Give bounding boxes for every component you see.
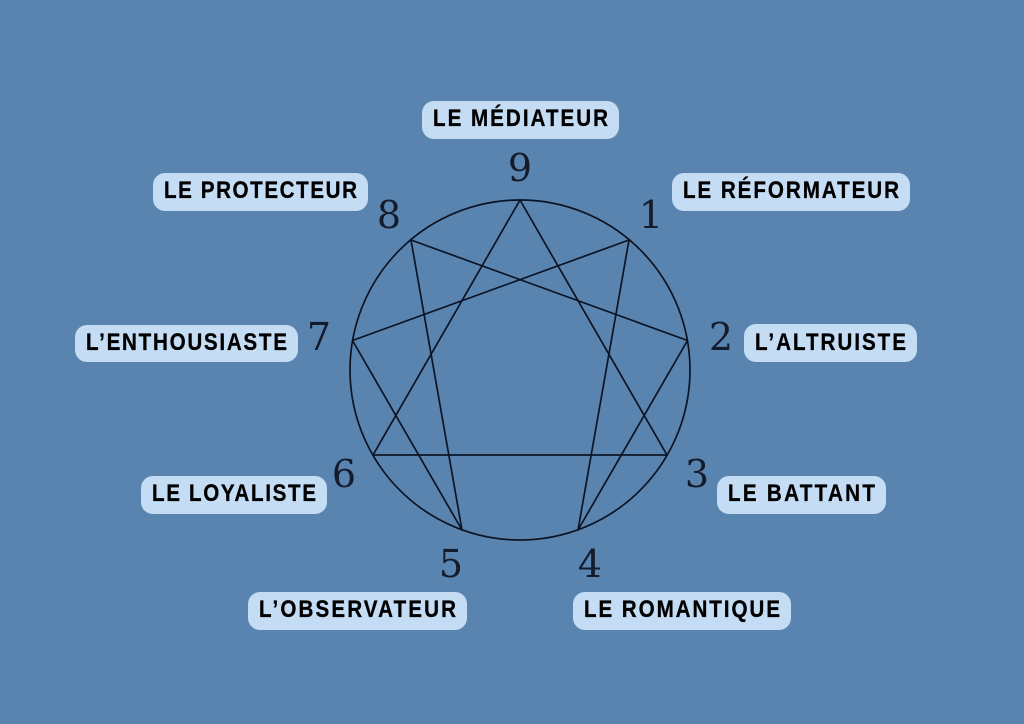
- number 7: 7: [307, 315, 331, 359]
- label: L'Altruiste: [744, 324, 917, 362]
- number 5: 5: [439, 542, 463, 586]
- label: Le Médiateur: LE MÉDIATEUR: [433, 105, 608, 131]
- label: L'Enthousiaste: L’ENTHOUSIASTE: [86, 329, 287, 355]
- label: L'Observateur: [248, 592, 467, 630]
- number 8: 8: [377, 193, 401, 237]
- label: L'Enthousiaste: [75, 325, 298, 362]
- label: Le Médiateur: [422, 101, 619, 139]
- number 9: 9: [508, 146, 532, 190]
- triangle 9-3-6: [373, 200, 667, 455]
- label: Le Protecteur: [153, 173, 368, 211]
- label: Le Battant: LE BATTANT: [728, 480, 875, 506]
- label: Le Battant: [717, 476, 886, 514]
- number 4: 4: [578, 542, 602, 586]
- number 2: 2: [709, 315, 733, 359]
- enneagram diagram: [350, 200, 690, 540]
- label: Le Réformateur: LE RÉFORMATEUR: [683, 177, 899, 203]
- outer circle: [350, 200, 690, 540]
- number 6: 6: [332, 452, 356, 496]
- label: L'Observateur: L’OBSERVATEUR: [259, 596, 456, 622]
- label: Le Réformateur: [672, 173, 910, 211]
- label: L'Altruiste: L’ALTRUISTE: [755, 329, 906, 355]
- number 1: 1: [639, 193, 663, 237]
- label: Le Romantique: [573, 592, 791, 630]
- label: Le Loyaliste: [141, 476, 327, 514]
- label: Le Loyaliste: LE LOYALISTE: [152, 480, 316, 506]
- hexad 1-4-2-8-5-7: [352, 240, 688, 530]
- label: Le Romantique: LE ROMANTIQUE: [584, 596, 780, 622]
- label: Le Protecteur: LE PROTECTEUR: [164, 177, 357, 203]
- number 3: 3: [685, 452, 709, 496]
